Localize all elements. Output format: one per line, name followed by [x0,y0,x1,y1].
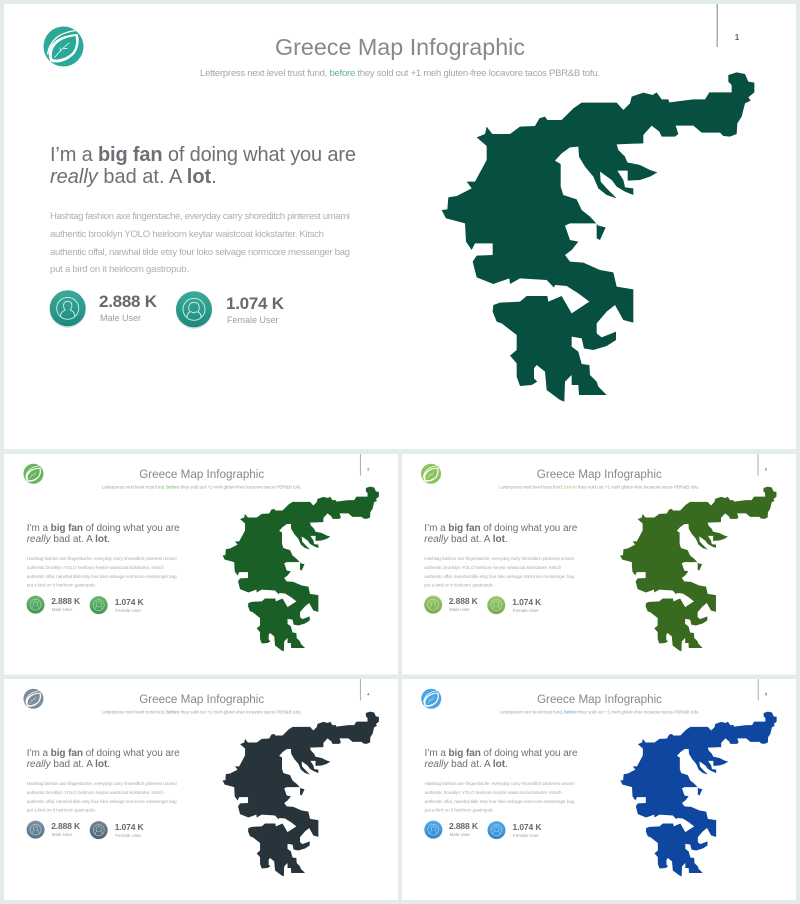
body text: authentic brooklyn YOLO heirloom keytar waistcoat kickstarter. Kitsch [424,790,562,796]
body text: put a bird on it heirloom gastropub. [27,808,96,814]
logo: teal leaf [44,26,84,66]
stat: male users [449,596,479,612]
heading: really bad at. A lot. [50,166,217,188]
stat icon: male user [424,596,442,614]
body text: authentic offal, narwhal tilde etsy four loko selvage normcore messenger bag [27,799,177,805]
stat icon: female user [487,596,505,614]
logo: blue leaf [421,689,441,709]
stat: male users [449,821,479,837]
stat: female users: 1.074 K [115,597,145,607]
page number divider [716,4,718,47]
stat: male users: 2.888 K [449,596,479,606]
body text: put a bird on it heirloom gastropub. [50,264,189,275]
stat: female users: Female User [513,833,539,838]
stat: male users: Male User [100,313,141,323]
body text: authentic brooklyn YOLO heirloom keytar waistcoat kickstarter. Kitsch [27,790,164,796]
body text: Hashtag fashion axe fingerstache, everyday carry shoreditch pinterest umami [27,781,177,787]
stat icon: male user [424,821,442,839]
stat: female users: 1.074 K [226,294,285,313]
heading: I’m a big fan of doing what you are [424,523,577,534]
stat icon: female user [488,821,506,839]
body text: authentic brooklyn YOLO heirloom keytar waistcoat kickstarter. Kitsch [424,565,562,571]
page number divider [758,679,759,700]
body text: Hashtag fashion axe fingerstache, everyday carry shoreditch pinterest umami [27,556,177,562]
panel: green slide [4,454,398,674]
page number divider [360,454,361,476]
stat icon: male user [50,290,86,328]
panel: lime slide [402,454,796,674]
title: Greece Map Infographic [275,34,525,60]
stat: female users: Female User [115,833,141,838]
map of Greece [223,712,379,876]
heading: I’m a big fan of doing what you are [50,144,356,166]
body text: authentic offal, narwhal tilde etsy four loko selvage normcore messenger bag [50,247,350,258]
stat: female users [115,597,145,613]
title: Greece Map Infographic [537,468,662,481]
map of Greece [442,72,754,402]
stat icon: male user [27,596,45,614]
stat: female users [115,822,145,838]
body text: authentic offal, narwhal tilde etsy four loko selvage normcore messenger bag [424,799,575,805]
logo: green leaf [23,464,43,484]
stat: male users: 2.888 K [51,596,81,606]
stat icon: male user [27,821,45,839]
page number: 4 [367,692,370,696]
stat: male users: Male User [52,832,73,837]
stat icon: female user [90,596,108,614]
heading: I’m a big fan of doing what you are [27,748,180,759]
map of Greece [620,487,776,651]
stat: female users: Female User [513,608,539,613]
map of Greece [223,487,379,651]
heading: really bad at. A lot. [27,534,110,545]
page number: 5 [765,692,768,696]
subtitle: Letterpress next level trust fund, before they sold out +1 meh gluten-free locavore tacos PBR&B tofu. [499,484,699,490]
title: Greece Map Infographic [139,693,264,706]
body text: put a bird on it heirloom gastropub. [424,808,494,814]
stat: male users: Male User [52,607,73,612]
body text: authentic brooklyn YOLO heirloom keytar waistcoat kickstarter. Kitsch [27,565,164,571]
stat: female users: Female User [115,608,141,613]
stat icon: female user [176,291,212,329]
stat: female users: 1.074 K [115,822,145,832]
stat: female users [226,294,285,325]
stat: male users: Male User [449,607,470,612]
body text: authentic offal, narwhal tilde etsy four loko selvage normcore messenger bag [424,574,575,580]
panel: main slide, teal [4,4,796,449]
body text: put a bird on it heirloom gastropub. [424,582,494,588]
body text: authentic brooklyn YOLO heirloom keytar waistcoat kickstarter. Kitsch [50,229,324,240]
panel: blue slide [402,679,796,900]
page number: 1 [735,33,740,42]
subtitle: Letterpress next level trust fund, before they sold out +1 meh gluten-free locavore tacos PBR&B tofu. [102,710,302,716]
stat: male users [51,596,81,612]
body text: Hashtag fashion axe fingerstache, everyday carry shoreditch pinterest umami [424,781,574,787]
stat: female users: Female User [227,315,279,325]
map of Greece [620,712,777,876]
body text: Hashtag fashion axe fingerstache, everyday carry shoreditch pinterest umami [424,556,574,562]
subtitle: Letterpress next level trust fund, before they sold out +1 meh gluten-free locavore tacos PBR&B tofu. [102,484,302,490]
heading: really bad at. A lot. [424,759,508,770]
page number divider [360,679,361,700]
subtitle: Letterpress next level trust fund, before they sold out +1 meh gluten-free locavore tacos PBR&B tofu. [200,68,600,79]
stat: male users [51,821,81,837]
title: Greece Map Infographic [139,468,264,481]
stat: female users [512,597,542,613]
panel: slate slide [4,679,398,900]
heading: I’m a big fan of doing what you are [424,748,578,759]
heading: really bad at. A lot. [424,534,508,545]
stat: male users: 2.888 K [51,821,81,831]
body text: put a bird on it heirloom gastropub. [27,582,96,588]
heading: I’m a big fan of doing what you are [27,523,180,534]
stat: male users: 2.888 K [99,292,158,311]
page number: 3 [765,466,768,472]
stat: female users [512,822,542,838]
stat: male users: 2.888 K [449,821,479,831]
page number divider [758,454,759,476]
logo: lime leaf [421,464,441,484]
title: Greece Map Infographic [537,693,662,706]
body text: authentic offal, narwhal tilde etsy four loko selvage normcore messenger bag [27,574,177,580]
heading: really bad at. A lot. [27,759,110,770]
stat: male users: Male User [450,832,471,837]
logo: slate leaf [23,689,43,709]
stat: female users: 1.074 K [512,597,542,607]
stat: female users: 1.074 K [512,822,542,832]
stat: male users [99,292,158,323]
page number: 2 [367,466,370,472]
stat icon: female user [90,821,108,839]
body text: Hashtag fashion axe fingerstache, everyday carry shoreditch pinterest umami [50,211,350,222]
subtitle: Letterpress next level trust fund, before they sold out +1 meh gluten-free locavore tacos PBR&B tofu. [500,710,700,716]
